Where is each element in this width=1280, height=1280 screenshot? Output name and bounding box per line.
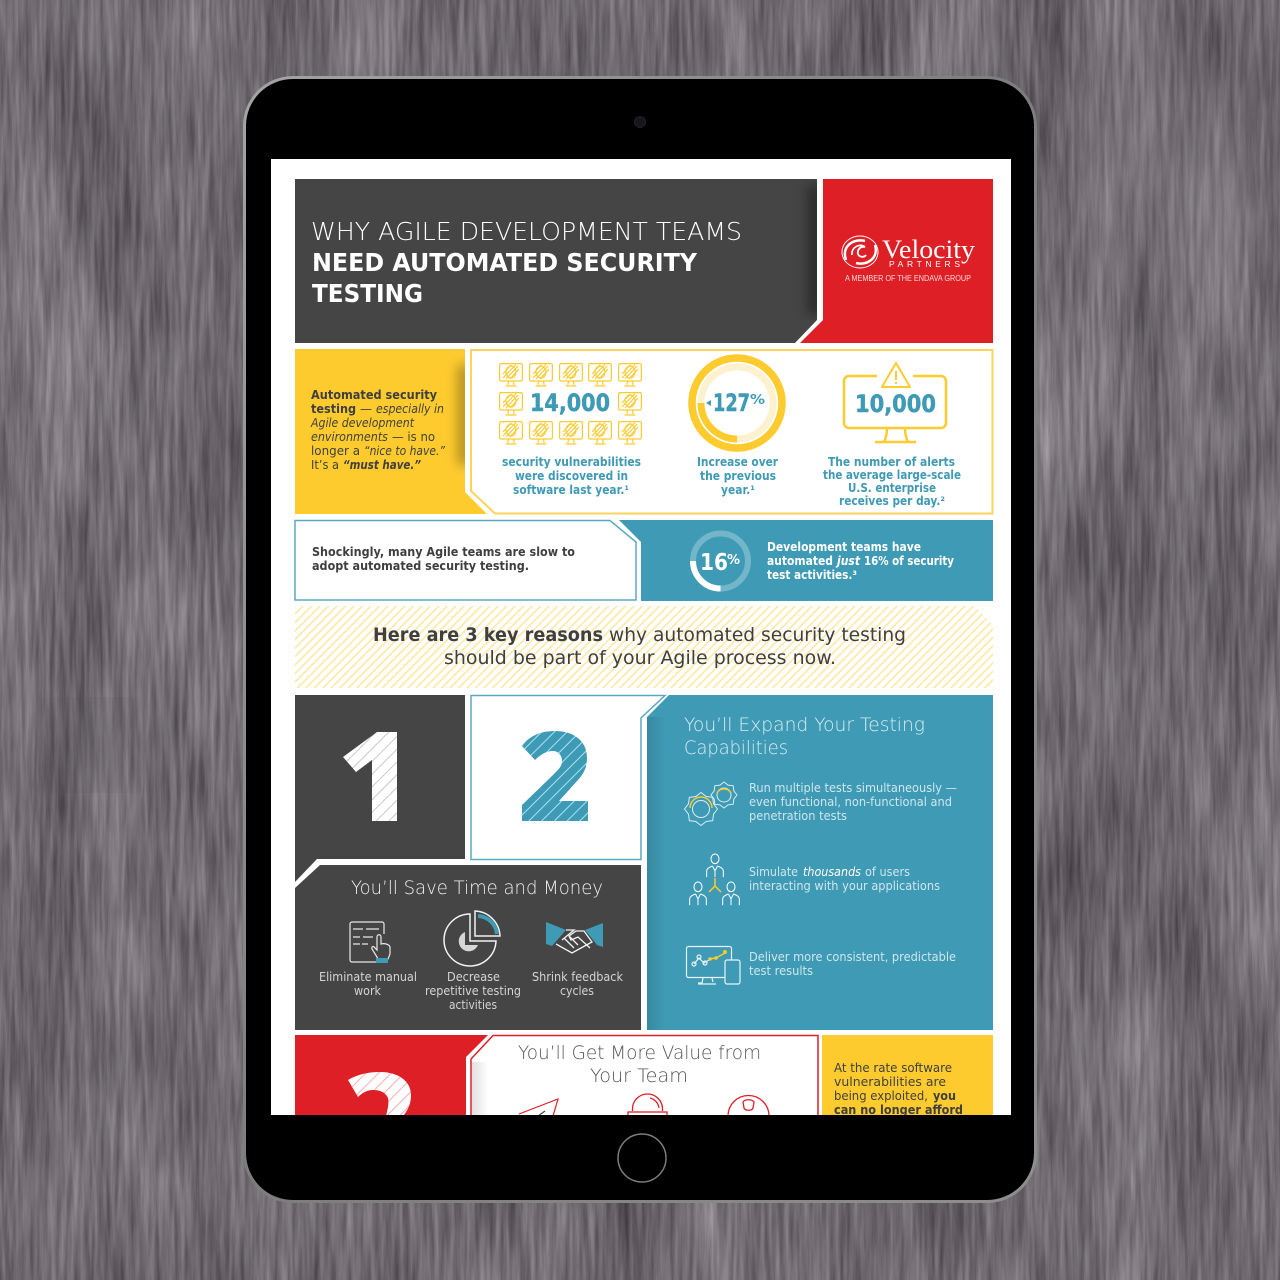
panel: closing callout xyxy=(822,1035,993,1117)
caption: work xyxy=(354,983,382,998)
icon: alert monitor xyxy=(844,363,946,442)
stat text: automated xyxy=(767,554,833,568)
caption: security vulnerabilities xyxy=(502,455,641,469)
intro text: “must have.” xyxy=(343,458,421,472)
panel: automated security intro xyxy=(295,349,487,514)
item text: simulate users: Simulate xyxy=(749,864,798,879)
icon grid: monitors xyxy=(500,364,641,444)
stat text: Development teams have xyxy=(767,540,921,554)
intro text: It’s a xyxy=(311,458,339,472)
intro text: especially in xyxy=(376,402,444,416)
callout text: you xyxy=(933,1088,956,1103)
panel: number 3 xyxy=(295,1035,488,1116)
item text: simultaneous tests: even functional, non-functional and xyxy=(749,794,952,809)
callout text: can no longer afford xyxy=(834,1102,963,1117)
tablet device xyxy=(243,76,1037,1203)
callout text: At the rate software xyxy=(834,1060,952,1075)
number: 10,000: 10,000 xyxy=(855,390,936,418)
icon: manual checklist xyxy=(350,922,390,963)
icon: pie chart xyxy=(444,911,500,966)
icon: lock xyxy=(628,1094,667,1122)
icon: camera xyxy=(634,116,646,128)
number: 127%: 127 xyxy=(713,389,750,417)
logo wordmark: Velocity xyxy=(882,235,975,264)
panel: more value from team xyxy=(471,1036,818,1136)
intro text: Automated security xyxy=(311,388,437,402)
adoption text: adopt automated security testing. xyxy=(312,559,529,573)
banner text: why automated security testing xyxy=(609,624,906,646)
banner text: Here are 3 key reasons xyxy=(373,624,603,646)
item text: simultaneous tests: penetration tests xyxy=(749,808,847,823)
caption xyxy=(502,455,641,497)
stat: 10,000 alerts xyxy=(823,363,961,508)
logo wordmark: PARTNERS xyxy=(889,259,960,269)
heading: You’ll Save Time and Money xyxy=(351,877,603,899)
caption: were discovered in xyxy=(515,469,628,483)
caption: software last year.¹ xyxy=(513,483,629,497)
caption: Eliminate manual xyxy=(319,969,417,984)
adoption text xyxy=(312,545,575,573)
intro text: environments xyxy=(311,430,388,444)
stat text: 16% of security xyxy=(864,554,954,568)
screen background xyxy=(271,159,1011,1115)
item text: simulate users: of users xyxy=(865,864,910,879)
panel: number 2 xyxy=(471,696,665,860)
caption: repetitive testing xyxy=(425,983,521,998)
number: 127% xyxy=(714,393,764,412)
panel: slow adoption xyxy=(295,520,636,600)
number: 14,000: 14,000 xyxy=(530,389,610,417)
caption xyxy=(319,969,417,998)
stat text xyxy=(767,542,954,579)
title: WHY AGILE DEVELOPMENT TEAMS xyxy=(311,217,742,246)
panel: save time and money xyxy=(295,865,641,1030)
icon: gears xyxy=(684,782,737,826)
donut chart xyxy=(692,358,782,448)
numeral 2 xyxy=(522,731,588,821)
item text: simultaneous tests xyxy=(749,780,957,823)
numeral 3 xyxy=(348,1072,411,1116)
intro text: — xyxy=(360,402,372,416)
caption: Increase over xyxy=(697,455,778,469)
number: 16%: 16 xyxy=(700,550,728,576)
title: TESTING xyxy=(312,279,423,308)
banner text xyxy=(373,624,906,669)
logo wordmark xyxy=(845,240,975,281)
icon: devices with trend line xyxy=(686,946,740,984)
intro text xyxy=(310,388,446,472)
icon: logo swirl xyxy=(842,236,878,268)
caption: U.S. enterprise xyxy=(848,481,936,495)
caption: cycles xyxy=(560,983,594,998)
item text: consistent results xyxy=(749,949,956,978)
number: 16%: % xyxy=(727,553,740,568)
numeral 1 xyxy=(343,732,397,821)
caption: activities xyxy=(449,997,497,1012)
stat text: just xyxy=(835,554,861,568)
banner text: should be part of your Agile process now. xyxy=(444,647,836,669)
number: 127%: % xyxy=(750,393,765,408)
caption: receives per day.² xyxy=(839,494,945,508)
icon: users xyxy=(690,854,739,905)
number: 16% xyxy=(702,552,740,570)
caption xyxy=(425,969,521,1012)
item text: simultaneous tests: Run multiple tests simultaneously — xyxy=(749,780,957,795)
caption xyxy=(532,969,624,998)
stat: 127 percent xyxy=(692,358,782,497)
panel: expand testing capabilities xyxy=(647,695,993,1030)
heading: Capabilities xyxy=(684,737,788,759)
caption: year.¹ xyxy=(721,483,755,497)
infographic screen content xyxy=(295,179,993,1136)
intro text: longer a xyxy=(311,444,360,458)
caption: the previous xyxy=(700,469,776,483)
logo wordmark: A MEMBER OF THE ENDAVA GROUP xyxy=(845,274,971,283)
icon: home button xyxy=(618,1134,666,1182)
intro text: testing xyxy=(311,402,356,416)
panel: 16 percent stat xyxy=(619,520,993,601)
heading: You’ll Get More Value from xyxy=(518,1042,761,1064)
heading xyxy=(684,717,924,758)
heading: Your Team xyxy=(590,1065,688,1087)
item text: consistent results: Deliver more consistent, predictable xyxy=(749,949,956,964)
icon: paper plane xyxy=(519,1099,558,1116)
intro text: — is no xyxy=(392,430,435,444)
panel: key reasons banner xyxy=(295,606,993,688)
title: NEED AUTOMATED SECURITY xyxy=(312,248,698,277)
caption: Decrease xyxy=(447,969,500,984)
icon: handshake xyxy=(546,922,603,953)
donut chart: 16% xyxy=(693,534,748,588)
callout text: vulnerabilities are xyxy=(834,1074,946,1089)
panel: statistics xyxy=(471,350,992,514)
caption: The number of alerts xyxy=(828,455,955,469)
intro text: “nice to have.” xyxy=(364,444,446,458)
item text: consistent results: test results xyxy=(749,963,813,978)
icon: person badge xyxy=(728,1096,769,1136)
heading: You’ll Expand Your Testing xyxy=(684,714,925,736)
stat text: test activities.³ xyxy=(767,568,857,582)
title xyxy=(312,222,740,302)
stat: 14,000 vulnerabilities xyxy=(500,364,641,497)
heading xyxy=(518,1042,761,1087)
item text: simulate users xyxy=(750,866,940,892)
panel: number 1 xyxy=(295,695,465,882)
item text: simulate users: thousands xyxy=(803,864,861,879)
callout text xyxy=(834,1060,963,1117)
caption: Shrink feedback xyxy=(532,969,624,984)
panel: logo xyxy=(800,179,993,343)
intro text: Agile development xyxy=(310,416,415,430)
adoption text: Shockingly, many Agile teams are slow to xyxy=(312,545,575,559)
callout text: being exploited, xyxy=(834,1088,928,1103)
panel: title banner xyxy=(295,179,822,343)
caption: the average large-scale xyxy=(823,468,961,482)
item text: simulate users: interacting with your applications xyxy=(749,878,940,893)
caption xyxy=(697,455,778,497)
caption xyxy=(823,455,961,508)
